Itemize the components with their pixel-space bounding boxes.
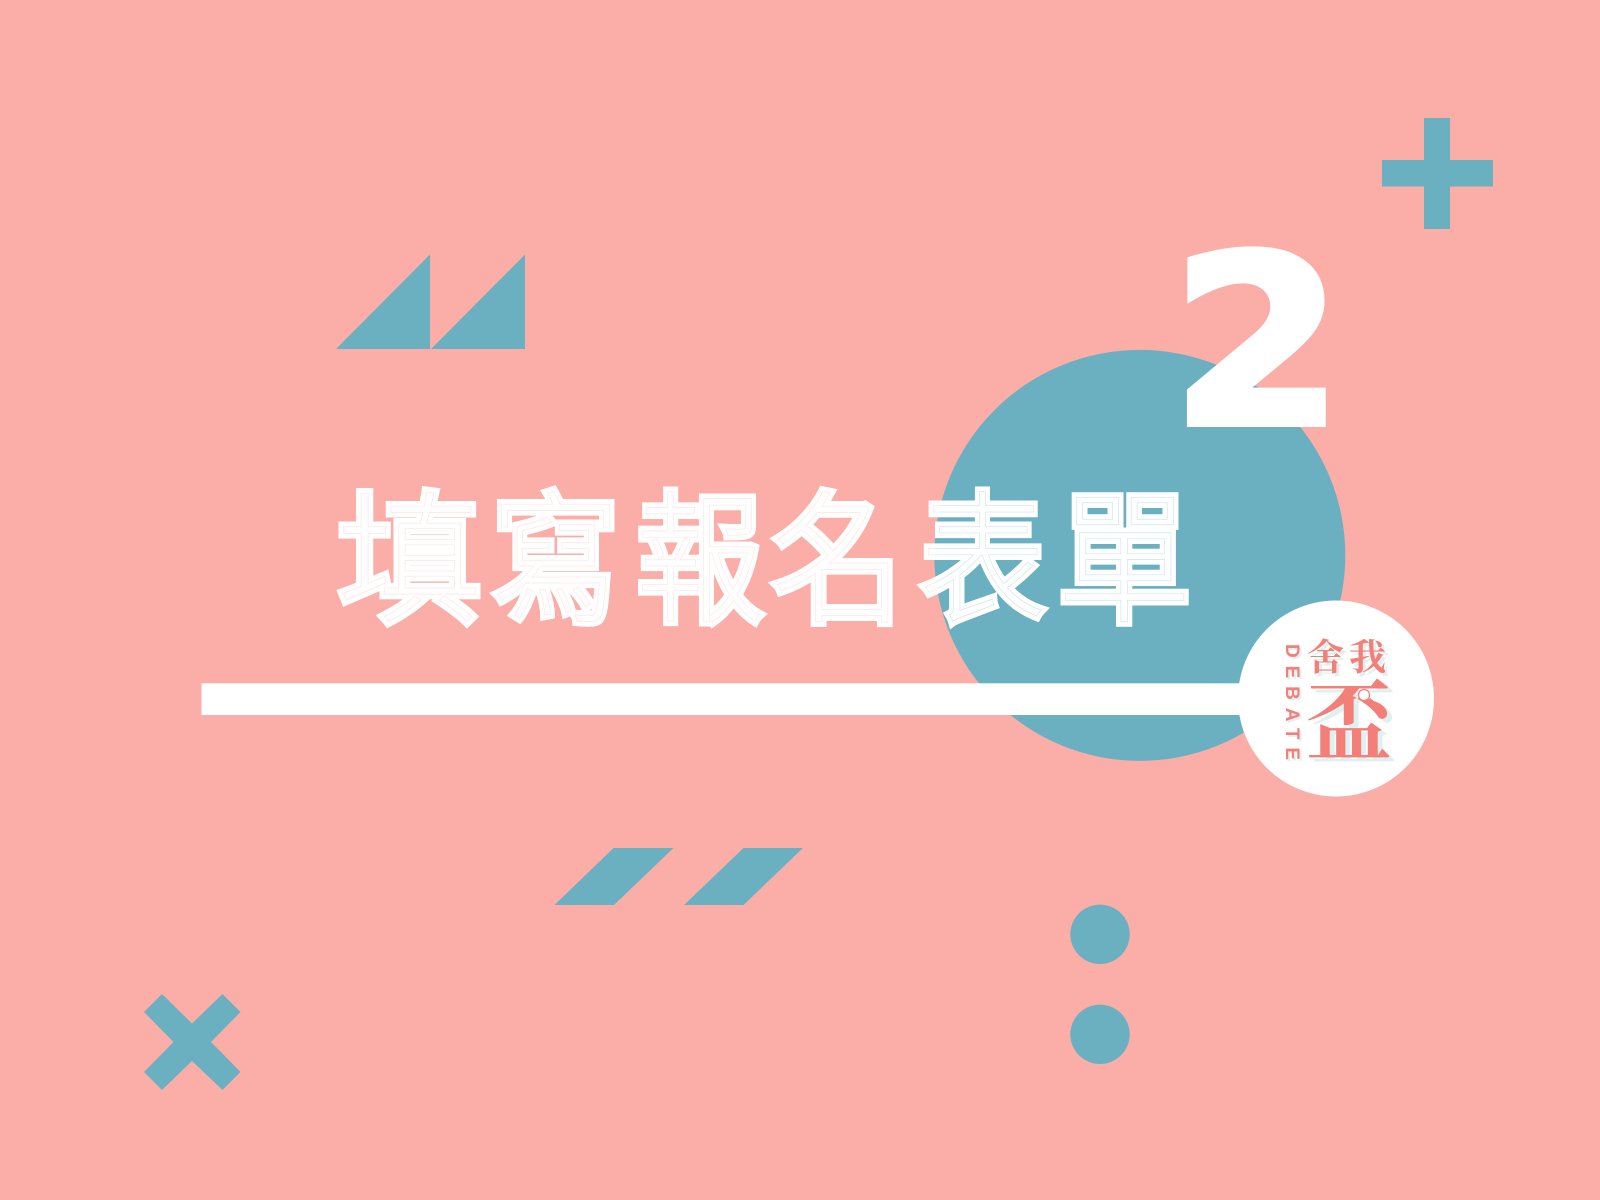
title: 名 [772, 483, 904, 642]
logo badge [1238, 600, 1434, 796]
title: 表 [919, 482, 1046, 642]
icon: double parallelograms [554, 848, 803, 905]
icon: microphone [1358, 690, 1382, 710]
title: 寫 [491, 482, 620, 641]
icon: double triangles [336, 254, 525, 349]
white horizontal bar [202, 683, 1262, 715]
logo text: 舍我: 我 [1352, 630, 1389, 684]
title: 填 [337, 483, 482, 642]
logo text: 盃: 盃 [1311, 657, 1402, 781]
logo text: 舍我: 舍 [1307, 627, 1344, 681]
icon: cross [144, 994, 240, 1090]
logo text: 舍我 [1307, 627, 1389, 684]
title: 單 [1057, 482, 1192, 642]
logo text: 舍我: 舍 [1310, 630, 1347, 684]
large teal circle [934, 350, 1345, 761]
logo text: DEBATE: DEBATE [1283, 646, 1304, 762]
title [336, 485, 1189, 630]
logo text: DEBATE: DEBATE [1281, 644, 1302, 760]
logo text: 舍我: 我 [1349, 627, 1386, 681]
icon: plus [1382, 118, 1493, 229]
logo text: 盃: 盃 [1306, 653, 1397, 777]
number 2: 2 [1171, 206, 1344, 479]
title: 報 [636, 481, 764, 642]
icon: two dots [1070, 905, 1130, 1064]
